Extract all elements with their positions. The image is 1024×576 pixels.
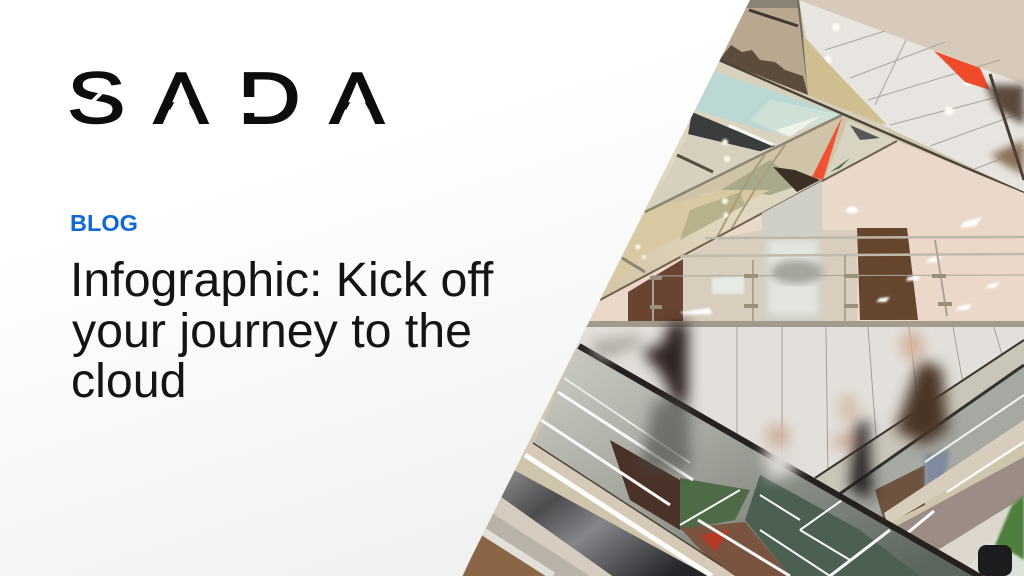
logo: SADA: A: [154, 59, 208, 139]
reflection: golden strut: [803, 37, 887, 125]
second diagonal mirror: [654, 116, 892, 210]
logo: SADA: A: [330, 59, 384, 139]
dark strut: [719, 60, 1024, 193]
plant: [968, 510, 1024, 576]
blurred people: [590, 322, 948, 500]
atrium back wall: [580, 141, 1024, 327]
ceiling lights: [824, 23, 973, 116]
lights: [680, 206, 1000, 315]
ceiling: beige soffit: [800, 0, 1024, 84]
lower escalator: [462, 440, 735, 576]
ceiling: white tiled panel: [799, 0, 1024, 192]
lower gold mirror: [612, 190, 770, 284]
photo: escalators in a mall atrium: [460, 0, 1024, 576]
section label: BLOG: BLOG: [70, 210, 138, 236]
dark reflected figure: [688, 112, 775, 155]
logo: SADA: S: [67, 58, 126, 139]
mirrored panels: [600, 61, 896, 300]
title: Infographic: Kick off: [70, 253, 494, 307]
main handrail: [579, 346, 982, 576]
warm panel reflection: [666, 134, 760, 192]
granite ledge: [580, 321, 1024, 327]
logo: SADA: D: [238, 58, 300, 138]
glass of the main escalator: [532, 345, 982, 576]
title: cloud: [71, 354, 186, 408]
title: your journey to the: [72, 304, 472, 358]
granite panels: [857, 228, 918, 320]
logo: SADA: [67, 58, 384, 139]
blurred figure top right: [985, 85, 1024, 175]
red panel: [934, 51, 990, 90]
reflection: wood stair wall: [719, 0, 809, 95]
glass balustrade: [653, 237, 1024, 322]
white wall: [575, 327, 1024, 482]
teal skylight reflection: [695, 70, 842, 133]
second escalator: [815, 340, 1024, 576]
red reflected column: [812, 117, 842, 180]
tiled wall: [683, 230, 857, 322]
column: [762, 181, 823, 322]
